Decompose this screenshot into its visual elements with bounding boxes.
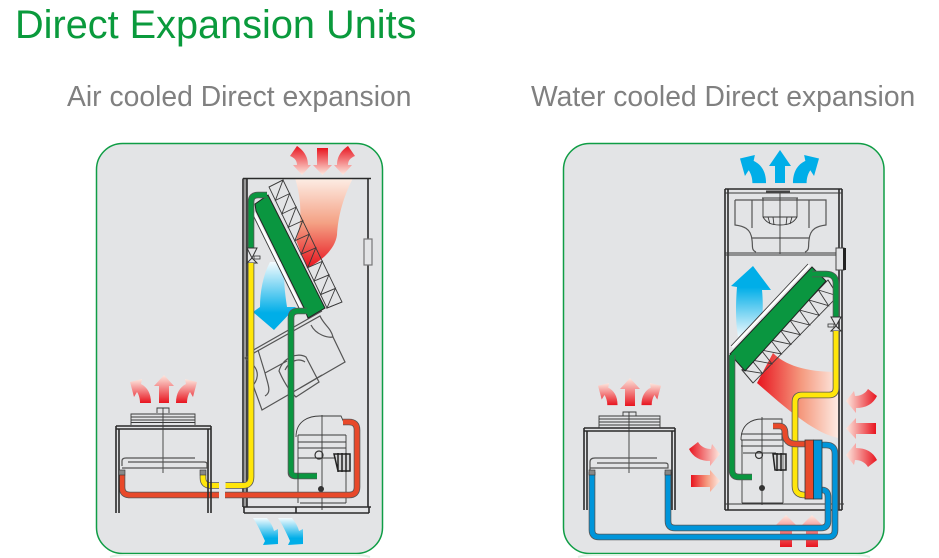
compressor (741, 417, 786, 505)
arrows: hot air from condenser (598, 378, 661, 406)
arrows: hot air leaving cabinet (290, 146, 355, 175)
evaporator coil (730, 264, 826, 371)
arrows: cold air leaving cabinet (740, 150, 819, 183)
blue water pipes (592, 445, 835, 537)
arrows: hot air from condenser (130, 375, 197, 403)
outdoor condenser (116, 408, 211, 513)
outdoor condenser (584, 412, 675, 510)
red hot gas pipe (122, 422, 357, 495)
expansion valve (828, 317, 841, 331)
red hot gas pipe fill (773, 426, 805, 444)
arrows: air entering left side (689, 442, 720, 492)
fan unit (735, 190, 846, 270)
expansion valve (247, 248, 260, 263)
faint panel reflection (110, 555, 870, 557)
hot air sweep (757, 353, 838, 438)
panel: water cooled direct expansion (564, 144, 884, 554)
fan unit (245, 311, 345, 410)
arrows: air entering right side (846, 389, 877, 467)
panel background (96, 144, 382, 554)
heading: air cooled: Air cooled Direct expansion (67, 80, 411, 112)
indoor cabinet (243, 178, 372, 513)
indoor cabinet (725, 189, 844, 510)
red hot gas pipe (773, 426, 805, 444)
cold air arrow (731, 266, 771, 337)
heading: water cooled: Water cooled Direct expansion (531, 80, 915, 112)
arrows: cold air under floor (253, 518, 303, 545)
yellow liquid pipe (795, 331, 836, 495)
cold air arrow (253, 262, 296, 330)
green refrigerant pipes (732, 274, 836, 477)
panel background (564, 144, 884, 554)
water heat exchanger (805, 440, 822, 499)
title: Direct Expansion Units (15, 3, 416, 47)
hot air plume (295, 178, 353, 268)
evaporator coil (252, 195, 325, 318)
arrows: air entering from below (775, 515, 823, 547)
yellow liquid pipe (203, 263, 251, 486)
yellow liquid pipe fill (795, 331, 836, 495)
compressor (296, 415, 350, 510)
air filter (742, 280, 838, 383)
green refrigerant pipes (251, 195, 317, 476)
panel: air cooled direct expansion (96, 144, 382, 554)
air filter (269, 180, 342, 308)
